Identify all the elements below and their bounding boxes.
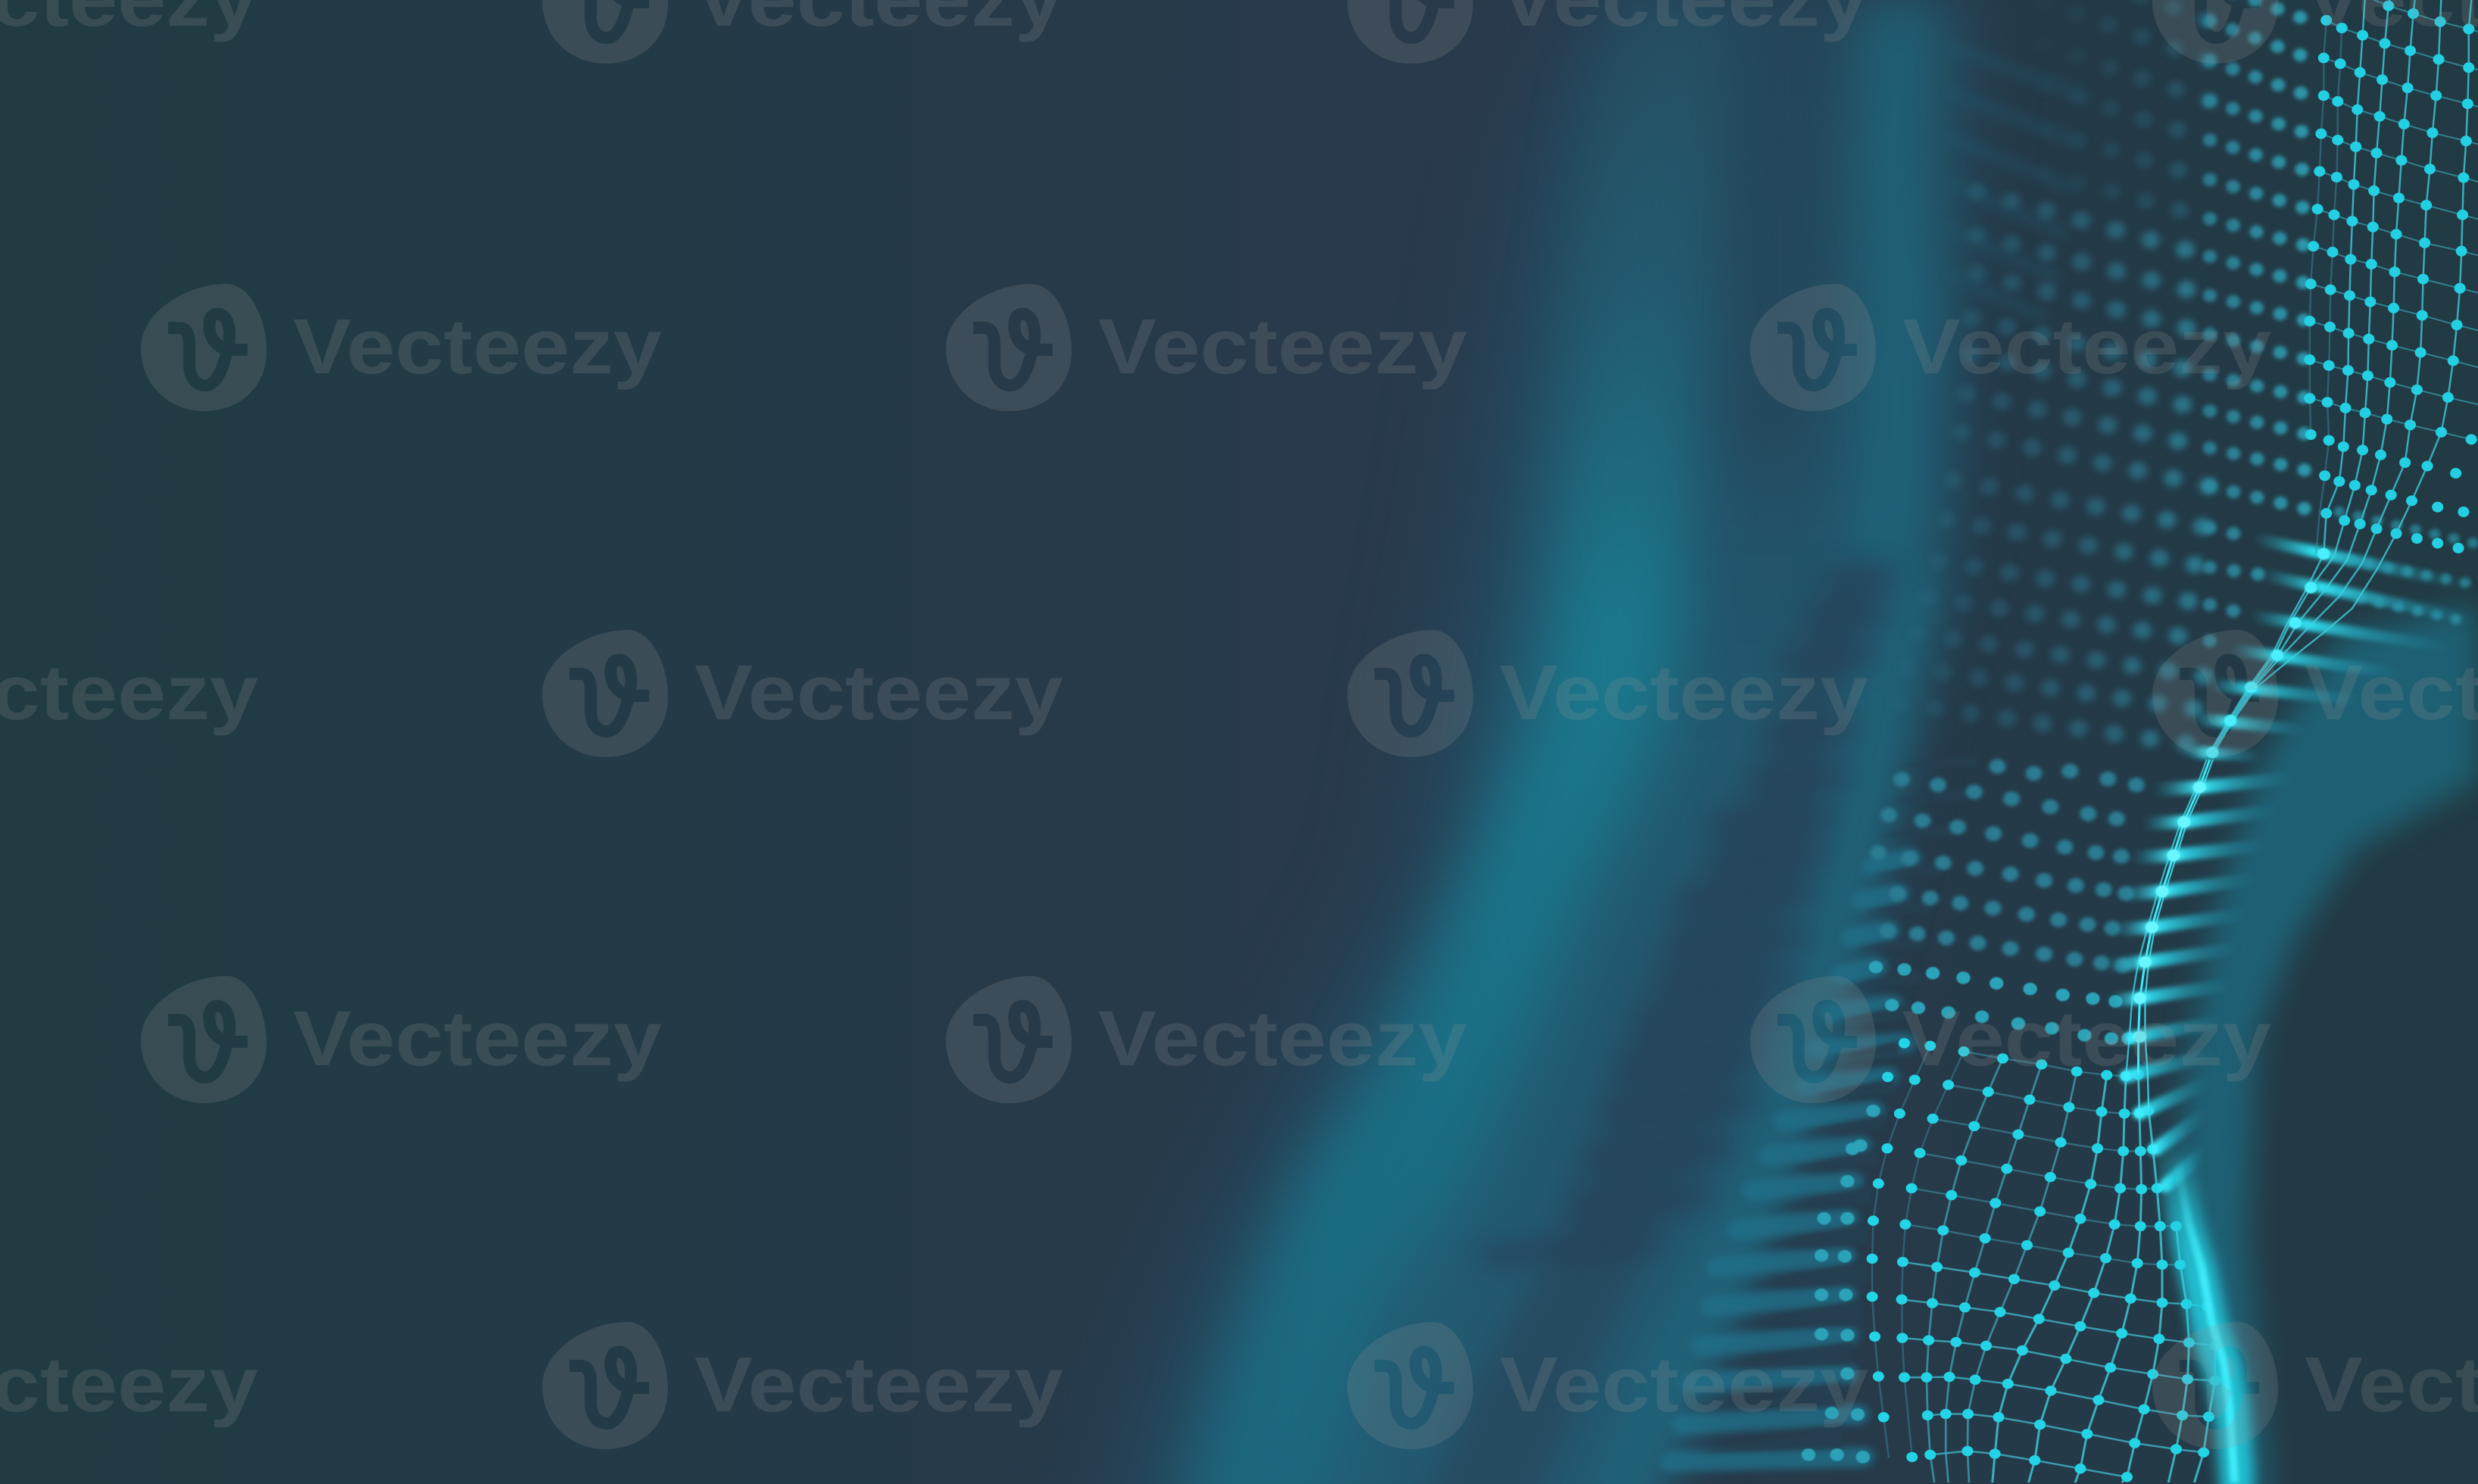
watermark row 2 [0, 618, 2478, 769]
blurred dot rows, right part of mesh [2210, 0, 2308, 650]
bright ridge core wires [2126, 759, 2235, 1482]
mesh section: upper, zoom-2 coordinate frame [1899, 0, 2478, 756]
watermark row 1: Vecteezy [1902, 303, 2271, 390]
flares extending from ridge [2106, 778, 2292, 1186]
bright nodes on upper ridge [2212, 554, 2324, 753]
dark vertical stripe between upper ridges [1768, 0, 1784, 454]
dots of streak rows [2184, 538, 2476, 756]
dark wedges cutting into teal band [1697, 755, 1977, 1452]
teal streak rows between wedges [1671, 858, 1909, 1462]
sharp mesh nodes [1872, 1043, 2215, 1477]
watermark row 2: Vecteezy [1500, 649, 1868, 736]
dim streak rows in upper part of band [1946, 45, 2090, 318]
soft outer glow left of wave [1144, 0, 1696, 1484]
watermark row 3: Vecteezy [293, 995, 662, 1082]
dim dots to right of ridge [2339, 512, 2474, 623]
watermark row 3: Vecteezy [1902, 995, 2271, 1082]
watermark row 1 [128, 272, 2271, 423]
right glow behind ridge [2181, 606, 2478, 1484]
watermark row 4: Vecteezy [694, 1341, 1063, 1428]
watermark row 0 [0, 0, 2478, 76]
grid column wires [1872, 1046, 2215, 1482]
blurred mesh dots, upper rows [1878, 766, 2136, 965]
dark streak blobs inside gap [1492, 578, 1883, 1257]
bright ridge nodes [2140, 787, 2199, 1037]
watermark row 2: Vecteezy [694, 649, 1063, 736]
semi-sharp mesh dots, middle rows [1809, 967, 2129, 1457]
blurred dot rows, left part of upper mesh [1977, 0, 2210, 219]
watermark row 4: Vecteezy [1500, 1341, 1868, 1428]
watermark row 1: Vecteezy [1098, 303, 1467, 390]
upper grid wires [2210, 0, 2478, 753]
streaked band along mesh edge [1628, 575, 1916, 1484]
watermark row 1: Vecteezy [293, 303, 662, 390]
upper mesh nodes [2310, 6, 2471, 548]
bright main band on left of wave [1280, 0, 1685, 1484]
watermark row 4 [0, 1310, 2478, 1461]
blurred dot rows, left part of middle mesh [1899, 192, 2210, 747]
soft body of teal wave [1204, 0, 1977, 1484]
mesh section: lower, zoom-1 coordinate frame [1671, 755, 2292, 1482]
bright ridge glow, lower [2171, 1128, 2238, 1480]
watermark row 3 [128, 964, 2271, 1115]
watermark row 3: Vecteezy [1098, 995, 1467, 1082]
dark gap between main band and streaked band [1431, 575, 1878, 1484]
upper right ridge of wave [1886, 0, 1901, 583]
